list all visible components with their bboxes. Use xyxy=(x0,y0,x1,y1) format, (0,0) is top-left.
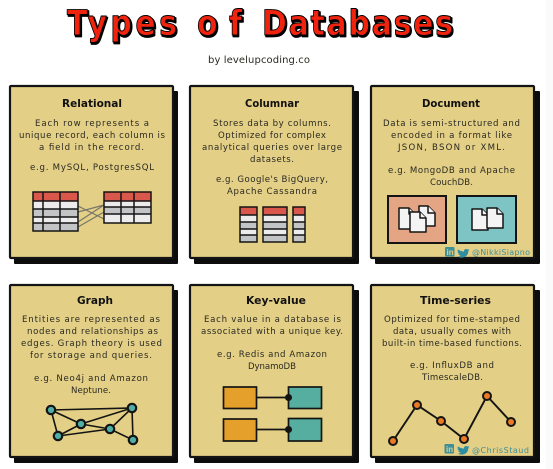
heading: key-value: Key-value xyxy=(246,294,306,307)
diagram: node graph xyxy=(47,404,137,444)
text: columnar description: datasets. xyxy=(250,155,294,165)
diagram: collection of two documents xyxy=(457,196,516,243)
text: columnar description xyxy=(202,119,342,197)
diagram: three columns xyxy=(240,207,305,242)
title: of xyxy=(197,3,243,44)
title: Databases xyxy=(262,3,453,44)
text: relational description: e.g. MySQL, PostgresSQL xyxy=(30,163,154,173)
title: Databases xyxy=(263,4,454,45)
credit: ChrisStaud: in xyxy=(446,445,453,454)
diagram: key-value pairs xyxy=(224,387,322,441)
title: of xyxy=(198,4,244,45)
credit: NikkiSiapno: @NikkiSiapno xyxy=(472,248,530,257)
diagram: collection of three documents xyxy=(388,196,446,243)
text: graph description xyxy=(21,315,162,396)
text: key-value description: e.g. Redis and Amazon xyxy=(217,350,327,360)
title xyxy=(67,3,454,45)
text: document description: encoded in a format like xyxy=(391,131,512,141)
chart: time-series line xyxy=(389,392,515,445)
panel: document xyxy=(371,86,540,264)
text: time-series description: Optimized for time-stamped xyxy=(384,315,520,325)
text: relational description: a field in the record. xyxy=(39,143,144,153)
text: time-series description xyxy=(382,315,522,383)
text: time-series description: e.g. InfluxDB and xyxy=(410,361,494,371)
credit: NikkiSiapno xyxy=(445,247,530,258)
text: columnar description: e.g. Google's BigQuery, xyxy=(216,175,328,185)
text: key-value description xyxy=(201,315,343,372)
text: graph description: e.g. Neo4j and Amazon xyxy=(34,374,148,384)
heading: columnar: Columnar xyxy=(245,97,300,110)
text: document description xyxy=(383,119,520,188)
panel: time-series xyxy=(371,285,540,463)
text: graph description: Neptune. xyxy=(71,386,111,396)
text: document description: CouchDB. xyxy=(430,178,473,188)
text: key-value description: associated with a unique key. xyxy=(201,327,343,337)
credit: NikkiSiapno: in xyxy=(446,248,454,257)
credit: ChrisStaud xyxy=(444,444,529,455)
subtitle: by levelupcoding.co xyxy=(208,55,310,66)
text: columnar description: Stores data by columns. xyxy=(213,119,331,129)
panel: graph xyxy=(10,285,178,463)
heading: relational: Relational xyxy=(62,97,122,110)
heading: time-series: Time-series xyxy=(420,294,491,307)
text: columnar description: analytical queries over large xyxy=(202,143,342,153)
text: time-series description: data, usually comes with xyxy=(393,327,511,337)
heading: document: Document xyxy=(422,97,480,110)
text: time-series description: TimescaleDB. xyxy=(421,373,483,383)
panel: columnar xyxy=(190,86,359,264)
text: key-value description: DynamoDB xyxy=(248,362,296,372)
text: key-value description: Each value in a database is xyxy=(204,315,342,325)
panel: relational xyxy=(10,86,178,264)
text: columnar description: Optimized for complex xyxy=(218,131,326,141)
text: time-series description: built-in time-based functions. xyxy=(382,339,522,349)
panel: key-value xyxy=(190,285,359,463)
diagram: two linked tables xyxy=(33,192,151,231)
text: graph description: nodes and relationships as xyxy=(27,327,159,337)
text: document description: JSON, BSON or XML. xyxy=(397,143,505,153)
text: document description: Data is semi-structured and xyxy=(383,119,520,129)
title: Types xyxy=(67,3,177,44)
text: document description: e.g. MongoDB and Apache xyxy=(388,166,515,176)
credit: ChrisStaud: @ChrisStaud xyxy=(472,446,529,455)
text: graph description: edges. Graph theory is used xyxy=(21,339,162,349)
text: relational description: Each row represents a xyxy=(35,119,149,129)
title: Types xyxy=(68,4,178,45)
heading: graph: Graph xyxy=(77,294,113,307)
text: relational description xyxy=(19,119,166,173)
text: graph description: Entities are represented as xyxy=(22,315,161,325)
text: columnar description: Apache Cassandra xyxy=(227,187,317,197)
text: graph description: for storage and queries. xyxy=(30,351,152,361)
text: relational description: unique record, each column is xyxy=(19,131,166,141)
